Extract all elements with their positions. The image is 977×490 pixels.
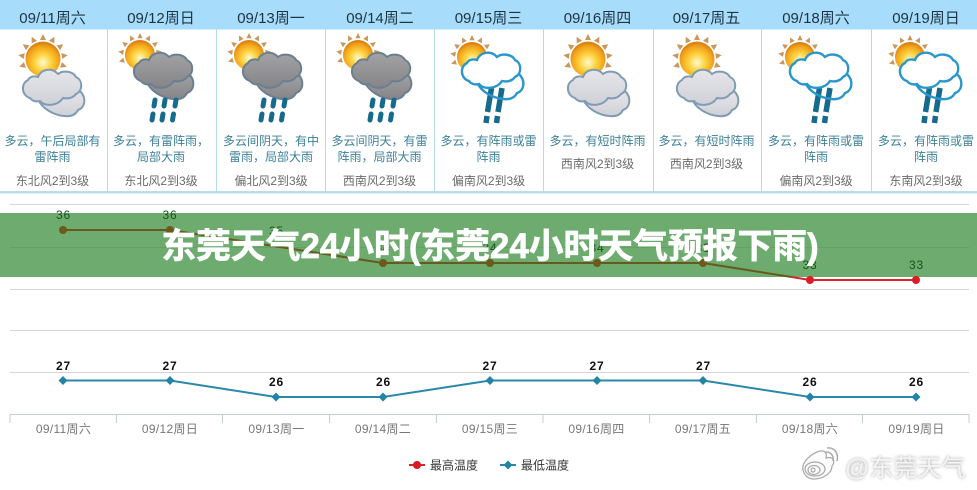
forecast column: 09/18: 阵雨 (804, 150, 828, 164)
forecast column: 09/12 (113, 10, 209, 188)
forecast column: 09/18: 09/18周六 (782, 10, 850, 27)
chart: low temperature line: 27 (483, 359, 497, 373)
forecast column: 09/19 (878, 10, 974, 188)
forecast column: 09/15: 偏南风2到3级 (452, 173, 525, 188)
forecast column: 09/11: 东北风2到3级 (16, 174, 89, 188)
title: 东莞天气24小时(东莞24小时天气预报下雨) (161, 227, 819, 266)
forecast column: 09/19: 东南风2到3级 (889, 173, 963, 188)
chart: high temperature line: 35 (269, 224, 284, 238)
forecast column: 09/16 (549, 10, 646, 171)
forecast column: 09/14: 多云间阴天，有雷 (331, 134, 428, 148)
forecast column: 09/15: 09/15周三 (455, 10, 522, 27)
chart: high temperature line: 36 (163, 208, 177, 222)
chart: low temperature line: 26 (269, 375, 284, 389)
x axis: 09/17周五 (675, 422, 731, 436)
forecast column: 09/14: 阵雨，局部大雨 (337, 149, 422, 164)
chart: high temperature line (56, 208, 924, 284)
forecast column: 09/14: 09/14周二 (346, 10, 414, 27)
chart: low temperature line: 27 (696, 359, 711, 373)
legend: 最高温度 (430, 458, 478, 472)
forecast column: 09/11 (4, 10, 101, 188)
forecast column: 09/12: 局部大雨 (137, 149, 185, 164)
forecast column: 09/18 (768, 10, 864, 188)
chart: low temperature line: 26 (376, 375, 391, 389)
forecast column: 09/17: 09/17周五 (673, 10, 740, 27)
forecast column: 09/13: 雷雨，局部大雨 (229, 149, 313, 164)
forecast column: 09/18: 多云，有阵雨或雷 (768, 134, 864, 148)
forecast column: 09/16: 09/16周四 (564, 10, 631, 27)
forecast column: 09/17: 西南风2到3级 (670, 156, 743, 171)
x axis: 09/13周一 (248, 422, 305, 436)
chart: low temperature line: 27 (590, 359, 604, 373)
forecast column: 09/12: 东北风2到3级 (124, 174, 198, 188)
chart: low temperature line: 26 (803, 375, 817, 389)
forecast column: 09/19: 阵雨 (914, 150, 938, 164)
chart: high temperature line: 34 (483, 241, 497, 255)
forecast column: 09/16: 多云，有短时阵雨 (549, 134, 646, 148)
forecast column: 09/16: 西南风2到3级 (561, 156, 634, 171)
chart: high temperature line: 34 (590, 241, 604, 255)
forecast column: 09/19: 09/19周日 (892, 10, 960, 27)
forecast column: 09/18: 偏南风2到3级 (779, 173, 853, 188)
forecast column: 09/13: 09/13周一 (237, 10, 305, 27)
x axis: 09/15周三 (462, 422, 518, 436)
chart: high temperature line: 34 (376, 241, 390, 255)
forecast column: 09/13: 多云间阴天，有中 (223, 133, 319, 148)
forecast column: 09/14 (331, 10, 428, 188)
panel: 9-day forecast table (0, 0, 977, 194)
forecast column: 09/17: 多云，有短时阵雨 (658, 134, 755, 148)
legend (409, 458, 569, 472)
forecast column: 09/11: 09/11周六 (19, 10, 86, 27)
forecast column: 09/13: 偏北风2到3级 (234, 173, 308, 188)
chart: high temperature line: 36 (56, 208, 71, 222)
x axis: 09/14周二 (355, 422, 411, 436)
chart: high temperature line: 33 (803, 258, 817, 272)
forecast column: 09/15: 阵雨 (476, 150, 501, 164)
forecast column: 09/11: 雷阵雨 (34, 150, 71, 164)
x axis: 09/18周六 (782, 422, 838, 436)
green title band (0, 213, 977, 277)
x axis: 09/16周四 (568, 422, 625, 436)
forecast column: 09/15: 多云，有阵雨或雷 (440, 134, 537, 148)
watermark: @东莞天气 (845, 455, 965, 482)
chart: high temperature line: 33 (696, 241, 710, 255)
x axis: 09/19周日 (888, 422, 945, 436)
forecast column: 09/12: 多云，有雷阵雨， (113, 134, 209, 148)
bottom border of forecast table (0, 191, 977, 194)
forecast column: 09/14: 西南风2到3级 (343, 173, 416, 188)
icon: weibo logo (803, 448, 837, 479)
forecast column: 09/15 (440, 10, 537, 188)
x axis: 09/11周六 (36, 422, 91, 436)
x axis: 09/12周日 (142, 422, 198, 436)
forecast column: 09/11: 多云，午后局部有 (4, 133, 101, 148)
legend: 最低温度 (521, 458, 569, 472)
chart: low temperature line (56, 359, 924, 402)
forecast column: 09/13 (223, 10, 319, 188)
chart: high temperature line: 33 (909, 258, 924, 272)
chart: low temperature line: 27 (56, 359, 71, 373)
watermark (803, 448, 965, 482)
chart: low temperature line: 27 (163, 359, 177, 373)
header band (0, 0, 977, 30)
forecast column: 09/19: 多云，有阵雨或雷 (878, 134, 974, 148)
x axis (10, 414, 969, 436)
chart: low temperature line: 26 (909, 375, 924, 389)
forecast column: 09/17 (658, 10, 755, 171)
forecast column: 09/12: 09/12周日 (127, 10, 195, 27)
